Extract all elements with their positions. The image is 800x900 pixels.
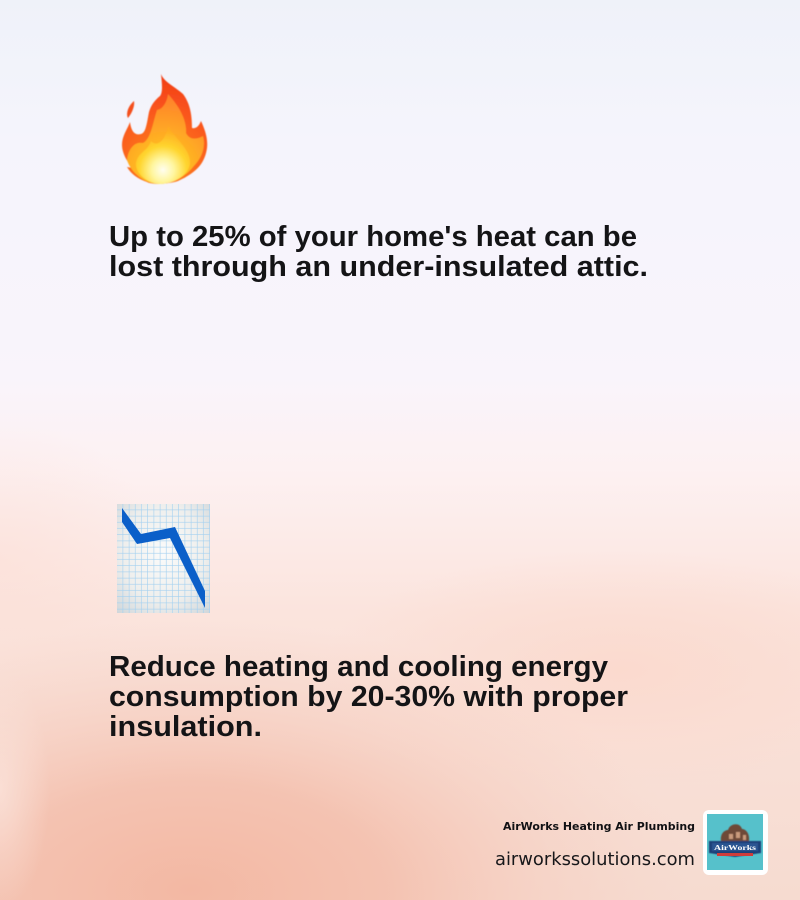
text: attic heat loss <box>109 221 648 283</box>
icon: fire <box>122 74 207 184</box>
text: energy savings: consumption by 20-30% with proper <box>109 681 628 713</box>
text: energy savings: Reduce heating and cooling energy <box>109 651 608 683</box>
website url: airworkssolutions.com <box>495 849 695 870</box>
icon: chart decreasing <box>117 504 210 613</box>
text: energy savings: insulation. <box>109 711 262 743</box>
logo wordmark: AirWorks <box>714 843 756 852</box>
text: attic heat loss: lost through an under-insulated attic. <box>109 251 648 283</box>
text: energy savings <box>109 651 628 743</box>
logo <box>703 810 768 875</box>
text: attic heat loss: Up to 25% of your home's heat can be <box>109 221 637 253</box>
company name: AirWorks Heating Air Plumbing <box>503 820 695 833</box>
